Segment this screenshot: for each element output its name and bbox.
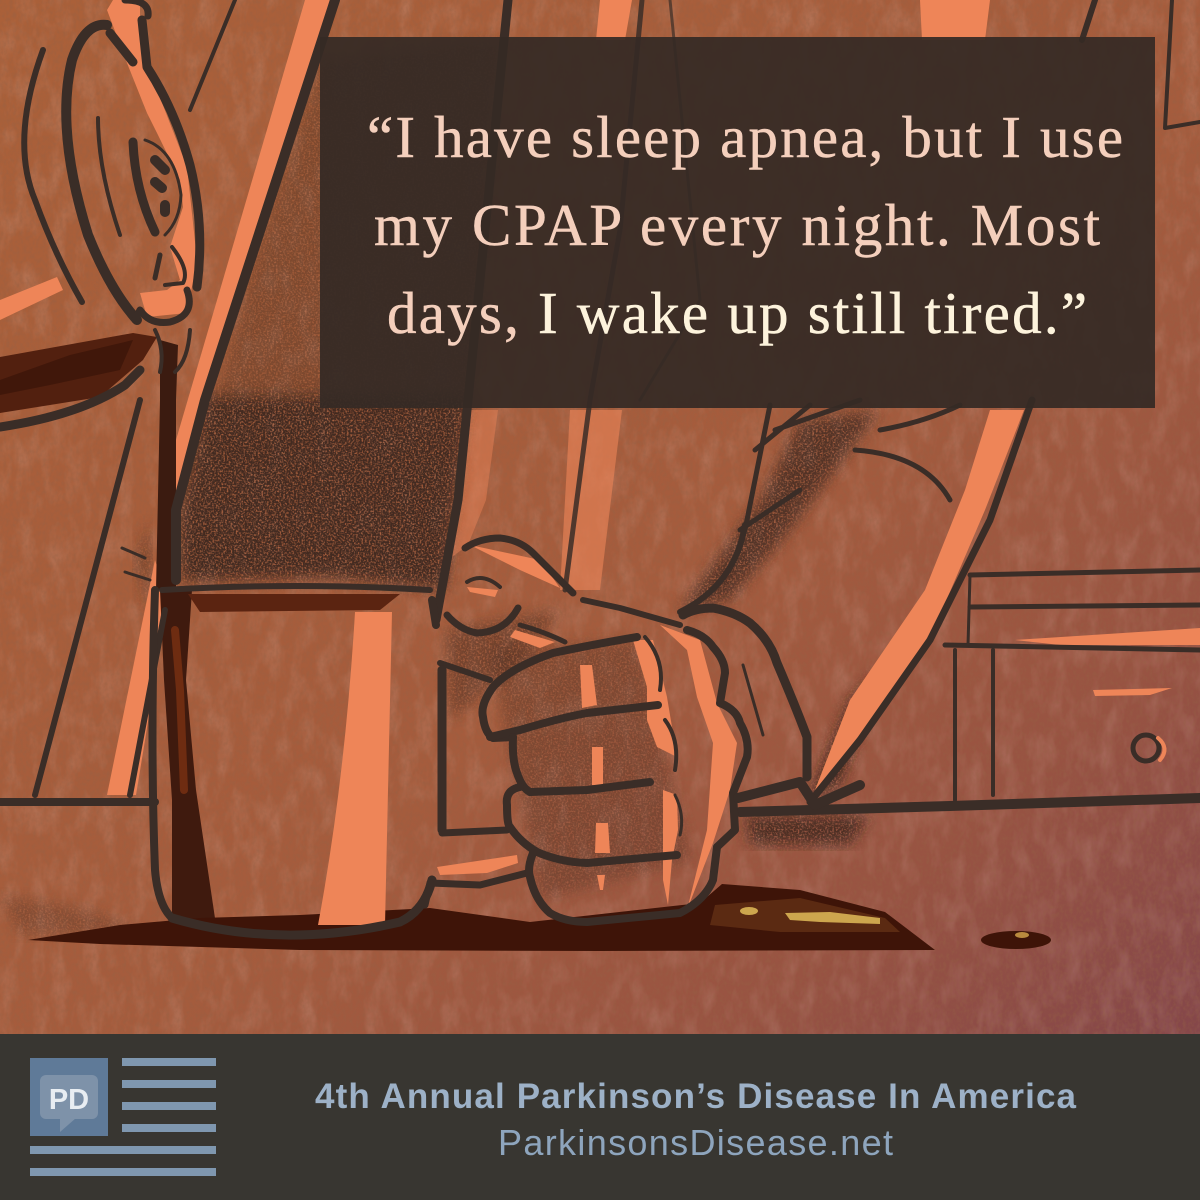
sleeve outlines: [35, 0, 1200, 802]
logo: PD flag: [30, 1058, 216, 1176]
quote text: days, I wake up still tired.”: [387, 280, 1087, 346]
logo speech bubble: [40, 1075, 98, 1132]
coffee mug: [152, 586, 527, 935]
orange sleeve stripes: [0, 0, 1200, 795]
drawer knob: [1133, 735, 1165, 761]
illustration: hand pouring coffee into a mug: [0, 0, 1200, 951]
table edge: [0, 798, 1200, 812]
fist highlights: [467, 545, 737, 910]
fist outlines: [447, 538, 860, 922]
coffee puddle on table: [28, 884, 1051, 951]
quote text: my CPAP every night. Most: [374, 192, 1101, 258]
telephone handset / hand at top left: [24, 0, 235, 322]
quote panel: [320, 37, 1155, 408]
coffee stream pouring down: [155, 330, 216, 925]
spilled coffee from tilted cup: [0, 333, 157, 427]
logo speech bubble: PD: [49, 1084, 89, 1116]
quote text: [367, 104, 1123, 346]
quote text: “I have sleep apnea, but I use: [367, 104, 1123, 170]
charcoal shading on shirt: [0, 40, 880, 935]
footer bar: [0, 1034, 1200, 1200]
mug handle: [425, 663, 527, 905]
desk drawer at right: [945, 570, 1200, 800]
footer website: ParkinsonsDisease.net: [498, 1122, 893, 1163]
gripping fist: [447, 538, 860, 922]
footer title: 4th Annual Parkinson’s Disease In America: [315, 1077, 1077, 1116]
